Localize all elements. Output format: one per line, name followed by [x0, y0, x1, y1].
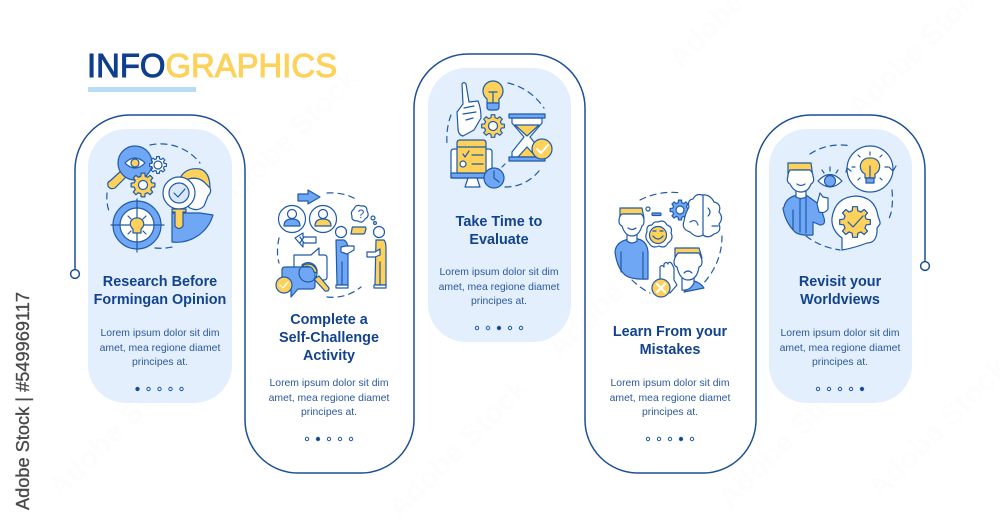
body text: amet, mea regione diamet	[610, 393, 730, 404]
body text: Lorem ipsum dolor sit dim	[270, 378, 388, 389]
heading: Formingan Opinion	[94, 292, 226, 308]
icon: people talking and speech bubbles	[276, 190, 386, 297]
heading: Self-Challenge	[279, 330, 379, 346]
heading: Complete a	[290, 312, 368, 328]
panel 3: take time	[428, 68, 571, 342]
icon: person, eye, bulb and head with gear	[783, 145, 896, 250]
title: INFOGRAPHICS	[87, 47, 337, 84]
heading: Research Before	[103, 274, 217, 290]
watermark pattern: Adobe Stock	[542, 212, 695, 365]
pagination dots	[305, 437, 353, 441]
body text: principes at.	[132, 357, 188, 368]
icon: people, brain, gear and stop hand	[615, 192, 722, 297]
body text: amet, mea regione diamet	[100, 343, 220, 354]
heading: Take Time to	[456, 214, 542, 230]
icon: hand, bulb, gear, hourglass, monitor	[447, 81, 552, 188]
body text: amet, mea regione diamet	[269, 393, 389, 404]
watermark pattern: Adobe Stock	[212, 62, 365, 215]
heading: Worldviews	[800, 292, 880, 308]
body text: Lorem ipsum dolor sit dim	[101, 328, 219, 339]
side credit: Adobe Stock number: Adobe Stock | #549969117	[13, 292, 33, 510]
panel 2: self-challenge	[269, 190, 389, 441]
body text: principes at.	[642, 407, 698, 418]
panel 4: mistakes	[610, 192, 730, 441]
body text: principes at.	[812, 357, 868, 368]
pagination dots	[816, 387, 864, 391]
watermark pattern: Adobe Stock	[382, 372, 535, 525]
body text: Lorem ipsum dolor sit dim	[440, 267, 558, 278]
panel 1: research	[88, 129, 232, 403]
body text: principes at.	[301, 407, 357, 418]
body text: Lorem ipsum dolor sit dim	[611, 378, 729, 389]
pagination dots	[136, 387, 183, 391]
panel 5: worldviews	[769, 129, 912, 403]
body text: Lorem ipsum dolor sit dim	[781, 328, 899, 339]
pagination dots	[646, 437, 694, 441]
heading: Revisit your	[799, 274, 881, 290]
watermark pattern: Adobe Stock	[712, 362, 865, 515]
heading: Evaluate	[469, 232, 529, 248]
icon: people talking and speech bubbles: ?	[358, 207, 365, 221]
pagination dots	[475, 326, 523, 330]
body text: amet, mea regione diamet	[439, 282, 559, 293]
heading: Activity	[303, 348, 355, 364]
watermark pattern: Adobe Stock	[42, 352, 195, 505]
connector outline	[71, 54, 929, 473]
heading: Mistakes	[640, 342, 700, 358]
body text: principes at.	[471, 296, 527, 307]
body text: amet, mea regione diamet	[780, 343, 900, 354]
heading: Learn From your	[613, 324, 727, 340]
icon: magnifiers, target and person	[107, 144, 213, 252]
